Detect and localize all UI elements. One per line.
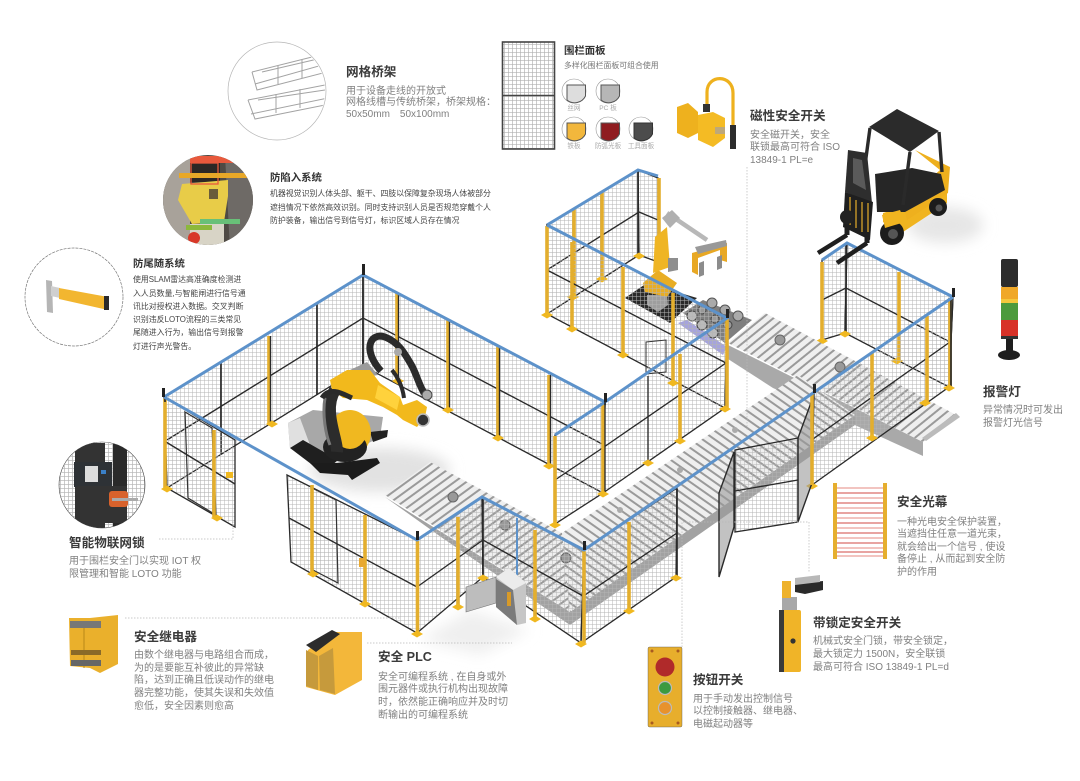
fence: hinged open door <box>719 394 812 577</box>
leader line <box>125 617 400 619</box>
text: anti-intrusion description: 机器视觉识别人体头部、躯干、四肢以保障复杂现场人体被部分 <box>270 188 491 198</box>
text: safety relay description: 为的是要能互补彼此的异常缺 <box>134 661 264 674</box>
floor shadows <box>310 207 983 655</box>
text: smart lock description: 用于围栏安全门以实现 IOT 权 <box>69 554 201 567</box>
heading: alarm light: 报警灯 <box>983 384 1021 399</box>
panel: push button switch <box>648 522 809 730</box>
icon: anti-arc sample: 防弧光板 <box>595 141 622 150</box>
icon: full fence panel <box>502 42 555 149</box>
text: alarm light description <box>983 403 1063 429</box>
heading: cable tray: 网格桥架 <box>346 64 397 79</box>
fence: front center sections <box>417 497 584 643</box>
heading: locking safety switch: 带锁定安全开关 <box>813 615 902 630</box>
icon: push button box <box>648 647 682 727</box>
icon: magnetic switch <box>677 79 736 149</box>
text: safety PLC description: 断输出的可编程系统 <box>378 708 468 721</box>
panel: smart IoT lock <box>59 442 233 580</box>
text: light curtain description: 护的作用 <box>897 565 937 578</box>
fence: upper robot cell rear <box>547 170 659 314</box>
icon: PC sample <box>596 79 620 112</box>
text: smart lock description: 限管理和智能 LOTO 功能 <box>69 567 182 580</box>
icon: steel sample <box>562 117 586 150</box>
icon: safety relay modules <box>69 615 118 673</box>
text: safety relay description <box>134 648 274 712</box>
heading: anti-intrusion system: 防陷入系统 <box>270 171 323 184</box>
text: anti-tailgating description: 灯进行声光警告。 <box>133 341 196 351</box>
icon: mesh sample <box>562 79 586 112</box>
text: anti-tailgating description <box>133 274 246 351</box>
heading: safety light curtain: 安全光幕 <box>897 494 948 509</box>
text: anti-tailgating description: 使用SLAM雷达高准确度检测进 <box>133 274 241 284</box>
text: alarm light description: 异常情况时可发出 <box>983 403 1063 416</box>
fence: upper right cell rear <box>816 243 953 387</box>
text: push button description: 以控制接触器、继电器、 <box>693 704 803 717</box>
text: alarm light description: 报警灯光信号 <box>983 416 1043 429</box>
heading: magnetic safety switch: 磁性安全开关 <box>750 108 826 123</box>
panel: cable tray <box>228 42 496 140</box>
icon: light curtain <box>833 483 887 559</box>
text: push button description <box>693 692 803 730</box>
heading: anti-tailgating system: 防尾随系统 <box>133 257 186 270</box>
diagram: isometric safety fence cell <box>161 109 960 648</box>
text: light curtain description: 一种光电安全保护装置， <box>897 515 1007 528</box>
text: anti-intrusion description: 遮挡情况下依然高效识别。同时支持识别人员是否规范穿戴个人 <box>270 202 491 212</box>
text: locking switch description: 最大锁定力 1500N，安全联锁 <box>813 647 945 660</box>
text: light curtain description: 备停止 , 从而起到安全防 <box>897 552 1005 565</box>
text: safety PLC description: 时，依然能正确响应并及时切 <box>378 695 508 708</box>
panel: locking safety switch <box>779 575 953 673</box>
conveyor: loading section with rollers <box>728 313 960 456</box>
blue top rail <box>164 297 953 550</box>
icon: safety PLC modules <box>306 630 362 695</box>
text: anti-tailgating description: 讯比对授权进入数据。交叉判断 <box>133 301 244 311</box>
text: anti-intrusion description <box>270 188 491 225</box>
icon: anti-arc sample <box>595 117 622 150</box>
fence: main cell rear <box>164 275 605 493</box>
text: light curtain description <box>897 515 1007 578</box>
leader line <box>159 520 233 539</box>
panel: safety PLC <box>306 630 512 721</box>
icon: vision recognition photo <box>163 155 255 250</box>
leader line <box>746 167 748 430</box>
icon: wire mesh cable tray <box>228 42 328 140</box>
heading: safety PLC: 安全 PLC <box>378 649 432 664</box>
panel: anti-tailgating system <box>25 248 246 351</box>
fence: upper robot cell front <box>541 225 731 528</box>
control cabinet <box>466 568 526 625</box>
text: safety relay description: 器完整功能，使其失误和失效值 <box>134 686 274 699</box>
panel: safety relay <box>69 615 400 712</box>
text: smart lock description <box>69 554 201 580</box>
icon: PC sample: PC 板 <box>599 103 617 112</box>
text: cable tray description: 50x50mm 50x100mm <box>346 109 449 120</box>
text: safety PLC description: 围元器件或执行机构出现故障 <box>378 682 508 695</box>
text: anti-tailgating description: 识别违反LOTO流程的三类常见 <box>133 314 241 324</box>
text: anti-tailgating description: 尾随进入行为，输出信号到报警 <box>133 327 244 337</box>
panel: alarm light <box>983 259 1063 429</box>
text: cable tray description: 网格线槽与传统桥架，桥架规格： <box>346 95 496 108</box>
leader line <box>367 642 512 644</box>
panel: magnetic safety switch <box>677 79 840 430</box>
text: anti-intrusion description: 防护装备，输出信号到信号灯，标识区域人员存在情况 <box>270 215 459 225</box>
text: locking switch description: 最高可符合 ISO 13849-1 PL=d <box>813 660 949 673</box>
robot: upper yellow arm with gripper <box>625 210 727 323</box>
text: push button description: 电磁起动器等 <box>693 717 753 730</box>
text: light curtain description: 当遮挡住任意一道光束， <box>897 527 1007 540</box>
fence: right sections along conveyor <box>581 297 955 643</box>
panel: fence panels <box>502 42 659 150</box>
text: cable tray description: 用于设备走线的开放式 <box>346 84 446 97</box>
text: safety relay description: 陷，达到正确且低误动作的继电 <box>134 673 274 686</box>
conveyor: long L-shaped section with rollers <box>385 375 855 625</box>
panel: safety light curtain <box>833 483 1007 578</box>
icon: tool panel sample <box>628 117 655 150</box>
text: safety relay description: 愈低，安全因素则愈高 <box>134 699 234 712</box>
panel: anti-intrusion system <box>163 155 491 250</box>
text: fence panels description: 多样化围栏面板可组合使用 <box>564 60 659 70</box>
text: light curtain description: 就会给出一个信号 , 使设 <box>897 540 1005 553</box>
robot: main yellow industrial robot <box>288 336 432 480</box>
heading: smart IoT lock: 智能物联网锁 <box>69 535 145 550</box>
icon: locking safety switch <box>779 575 823 672</box>
stack lights on fence corners <box>162 264 955 550</box>
fence: front left section <box>287 475 417 633</box>
icon: mesh sample: 丝网 <box>567 103 581 112</box>
text: anti-tailgating description: 入人员数量,与智能闸进行信号通 <box>133 288 246 298</box>
heading: push button switch: 按钮开关 <box>693 672 744 687</box>
icon: smart lock on mesh <box>59 442 145 529</box>
text: locking switch description: 机械式安全门锁，带安全锁定， <box>813 634 953 647</box>
text: safety PLC description <box>378 670 508 721</box>
text: magnetic switch description: 13849-1 PL=e <box>750 155 814 166</box>
text: push button description: 用于手动发出控制信号 <box>693 692 793 705</box>
leader line <box>682 522 809 647</box>
text: locking switch description <box>813 634 953 673</box>
text: magnetic switch description: 联锁最高可符合 ISO <box>750 140 840 153</box>
icon: steel sample: 铁板 <box>567 141 581 150</box>
corner posts <box>165 397 605 648</box>
heading: safety relay: 安全继电器 <box>134 629 197 644</box>
text: magnetic switch description: 安全磁开关，安全 <box>750 128 830 141</box>
text: magnetic switch description <box>750 128 840 166</box>
parts: gear stack on lilac tray <box>678 298 752 355</box>
text: safety relay description: 由数个继电器与电路组合而成， <box>134 648 274 661</box>
fence: left door section <box>161 397 235 527</box>
text: safety PLC description: 安全可编程系统 , 在自身或外 <box>378 670 506 683</box>
heading: fence panels: 围栏面板 <box>564 44 606 57</box>
text: cable tray description <box>346 84 496 120</box>
icon: tool panel sample: 工具面板 <box>628 141 655 150</box>
icon: lidar barrier <box>25 248 123 346</box>
forklift <box>818 109 950 263</box>
icon: stack light tower <box>998 259 1020 360</box>
